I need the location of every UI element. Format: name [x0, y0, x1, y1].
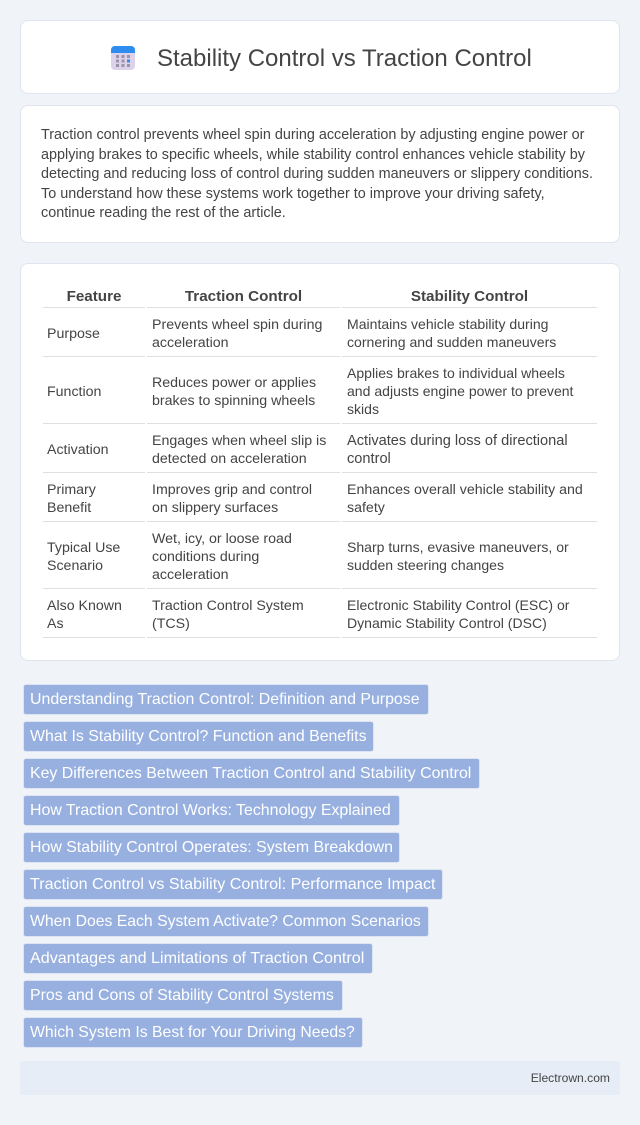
comparison table: and adjusts engine power to prevent — [347, 383, 573, 399]
table panel — [20, 263, 620, 661]
header panel — [20, 20, 620, 94]
tag: Understanding Traction Control: Understanding Traction Control: Definition and Purpose — [30, 691, 420, 708]
intro text: applying brakes to specific wheels, while stability control enhances vehicle stability by — [41, 146, 585, 162]
intro text: To understand how these systems work together to improve your driving safety, — [41, 186, 545, 202]
intro panel — [20, 105, 620, 243]
row: Also Known As: Also Known — [47, 598, 122, 614]
row: Primary Benefit — [47, 482, 96, 516]
title: Stability Control vs Traction Control — [157, 45, 532, 72]
comparison table: skids — [347, 401, 379, 417]
tag: Key Differences: Key Differences Between Traction Control and Stability Control — [30, 765, 471, 782]
comparison table — [43, 288, 597, 638]
tag: How Stability Control Operates — [23, 832, 400, 863]
tag: Performance Impact — [23, 869, 443, 900]
comparison table: Traction Control System — [152, 598, 304, 614]
comparison table: Improves grip and control — [152, 482, 312, 498]
row: Typical Use Scenario — [47, 540, 120, 574]
comparison table: acceleration — [152, 335, 229, 351]
comparison table: conditions during — [152, 549, 259, 565]
row: Primary Benefit: Benefit — [47, 500, 91, 516]
tag: When Does Each System Activate: When Does Each System Activate? Common Scenarios — [30, 913, 421, 930]
tag: Understanding Traction Control — [23, 684, 429, 715]
row: Typical Use Scenario: Typical Use — [47, 540, 120, 556]
comparison table: Enhances overall vehicle stability and — [347, 482, 583, 498]
tag: Advantages and Limitations: Advantages and Limitations of Traction Control — [30, 949, 364, 967]
tag: Which System Is Best — [23, 1017, 363, 1048]
comparison table: Sharp turns, evasive maneuvers, or — [347, 539, 569, 555]
tag: Key Differences — [23, 758, 480, 789]
intro text — [41, 127, 593, 221]
comparison table: Dynamic Stability Control (DSC) — [347, 615, 547, 631]
comparison table: Engages when wheel slip is — [152, 433, 326, 449]
column header: Traction Control: Traction Control — [185, 288, 302, 305]
column header: Stability Control: Stability Control — [411, 288, 528, 305]
tag: When Does Each System Activate — [23, 906, 429, 937]
row: Also Known As: As — [47, 616, 64, 632]
comparison table: Reduces power or applies — [152, 375, 316, 391]
footer bar — [20, 1061, 620, 1095]
tag: What Is Stability Control: What Is Stability Control? Function and Benefits — [30, 728, 367, 745]
comparison table: sudden steering changes — [347, 557, 504, 573]
comparison table: cornering and sudden maneuvers — [347, 334, 556, 350]
tag: How Traction Control Works — [23, 795, 400, 826]
intro text: Traction control prevents wheel spin during acceleration by adjusting engine power or — [41, 127, 584, 143]
tag: Pros and Cons: Pros and Cons of Stability Control Systems — [30, 987, 334, 1004]
topic link list — [23, 684, 480, 1048]
comparison table: Maintains vehicle stability during — [347, 316, 548, 332]
tag: Performance Impact: Traction Control vs Stability Control: Performance Impact — [30, 875, 435, 893]
comparison table: detected on acceleration — [152, 451, 307, 467]
icon: calendar — [111, 46, 135, 70]
comparison table: Electronic Stability Control (ESC) or — [347, 597, 569, 613]
comparison table: on slippery surfaces — [152, 500, 278, 516]
footer credit: Electrown.com — [531, 1071, 610, 1085]
tag: How Traction Control Works: How Traction Control Works: Technology Explained — [30, 802, 391, 819]
column header: Feature: Feature — [67, 288, 121, 305]
row: Activation: Activation — [47, 442, 109, 458]
tag: How Stability Control Operates: How Stability Control Operates: System Breakdown — [30, 839, 393, 856]
comparison table: Prevents wheel spin during — [152, 317, 322, 333]
comparison table: brakes to spinning wheels — [152, 393, 315, 409]
comparison table: control — [347, 451, 391, 467]
row: Primary Benefit: Primary — [47, 482, 96, 498]
intro text: detecting and reducing loss of control during sudden maneuvers or slippery conditions. — [41, 166, 593, 182]
row: Purpose: Purpose — [47, 326, 100, 342]
tag: Advantages and Limitations — [23, 943, 373, 974]
comparison table: Wet, icy, or loose road — [152, 531, 292, 547]
tag: What Is Stability Control — [23, 721, 374, 752]
comparison table: (TCS) — [152, 616, 190, 632]
row: Also Known As — [47, 598, 122, 632]
intro text: continue reading the rest of the article. — [41, 205, 286, 221]
comparison table: Applies brakes to individual wheels — [347, 365, 565, 381]
comparison table: acceleration — [152, 567, 229, 583]
tag: Which System Is Best: Which System Is Best for Your Driving Needs? — [30, 1024, 355, 1041]
comparison table: safety — [347, 500, 385, 516]
tag: Pros and Cons — [23, 980, 343, 1011]
row: Typical Use Scenario: Scenario — [47, 558, 103, 574]
row: Function: Function — [47, 384, 101, 400]
comparison table: Activates during loss of directional — [347, 433, 568, 449]
